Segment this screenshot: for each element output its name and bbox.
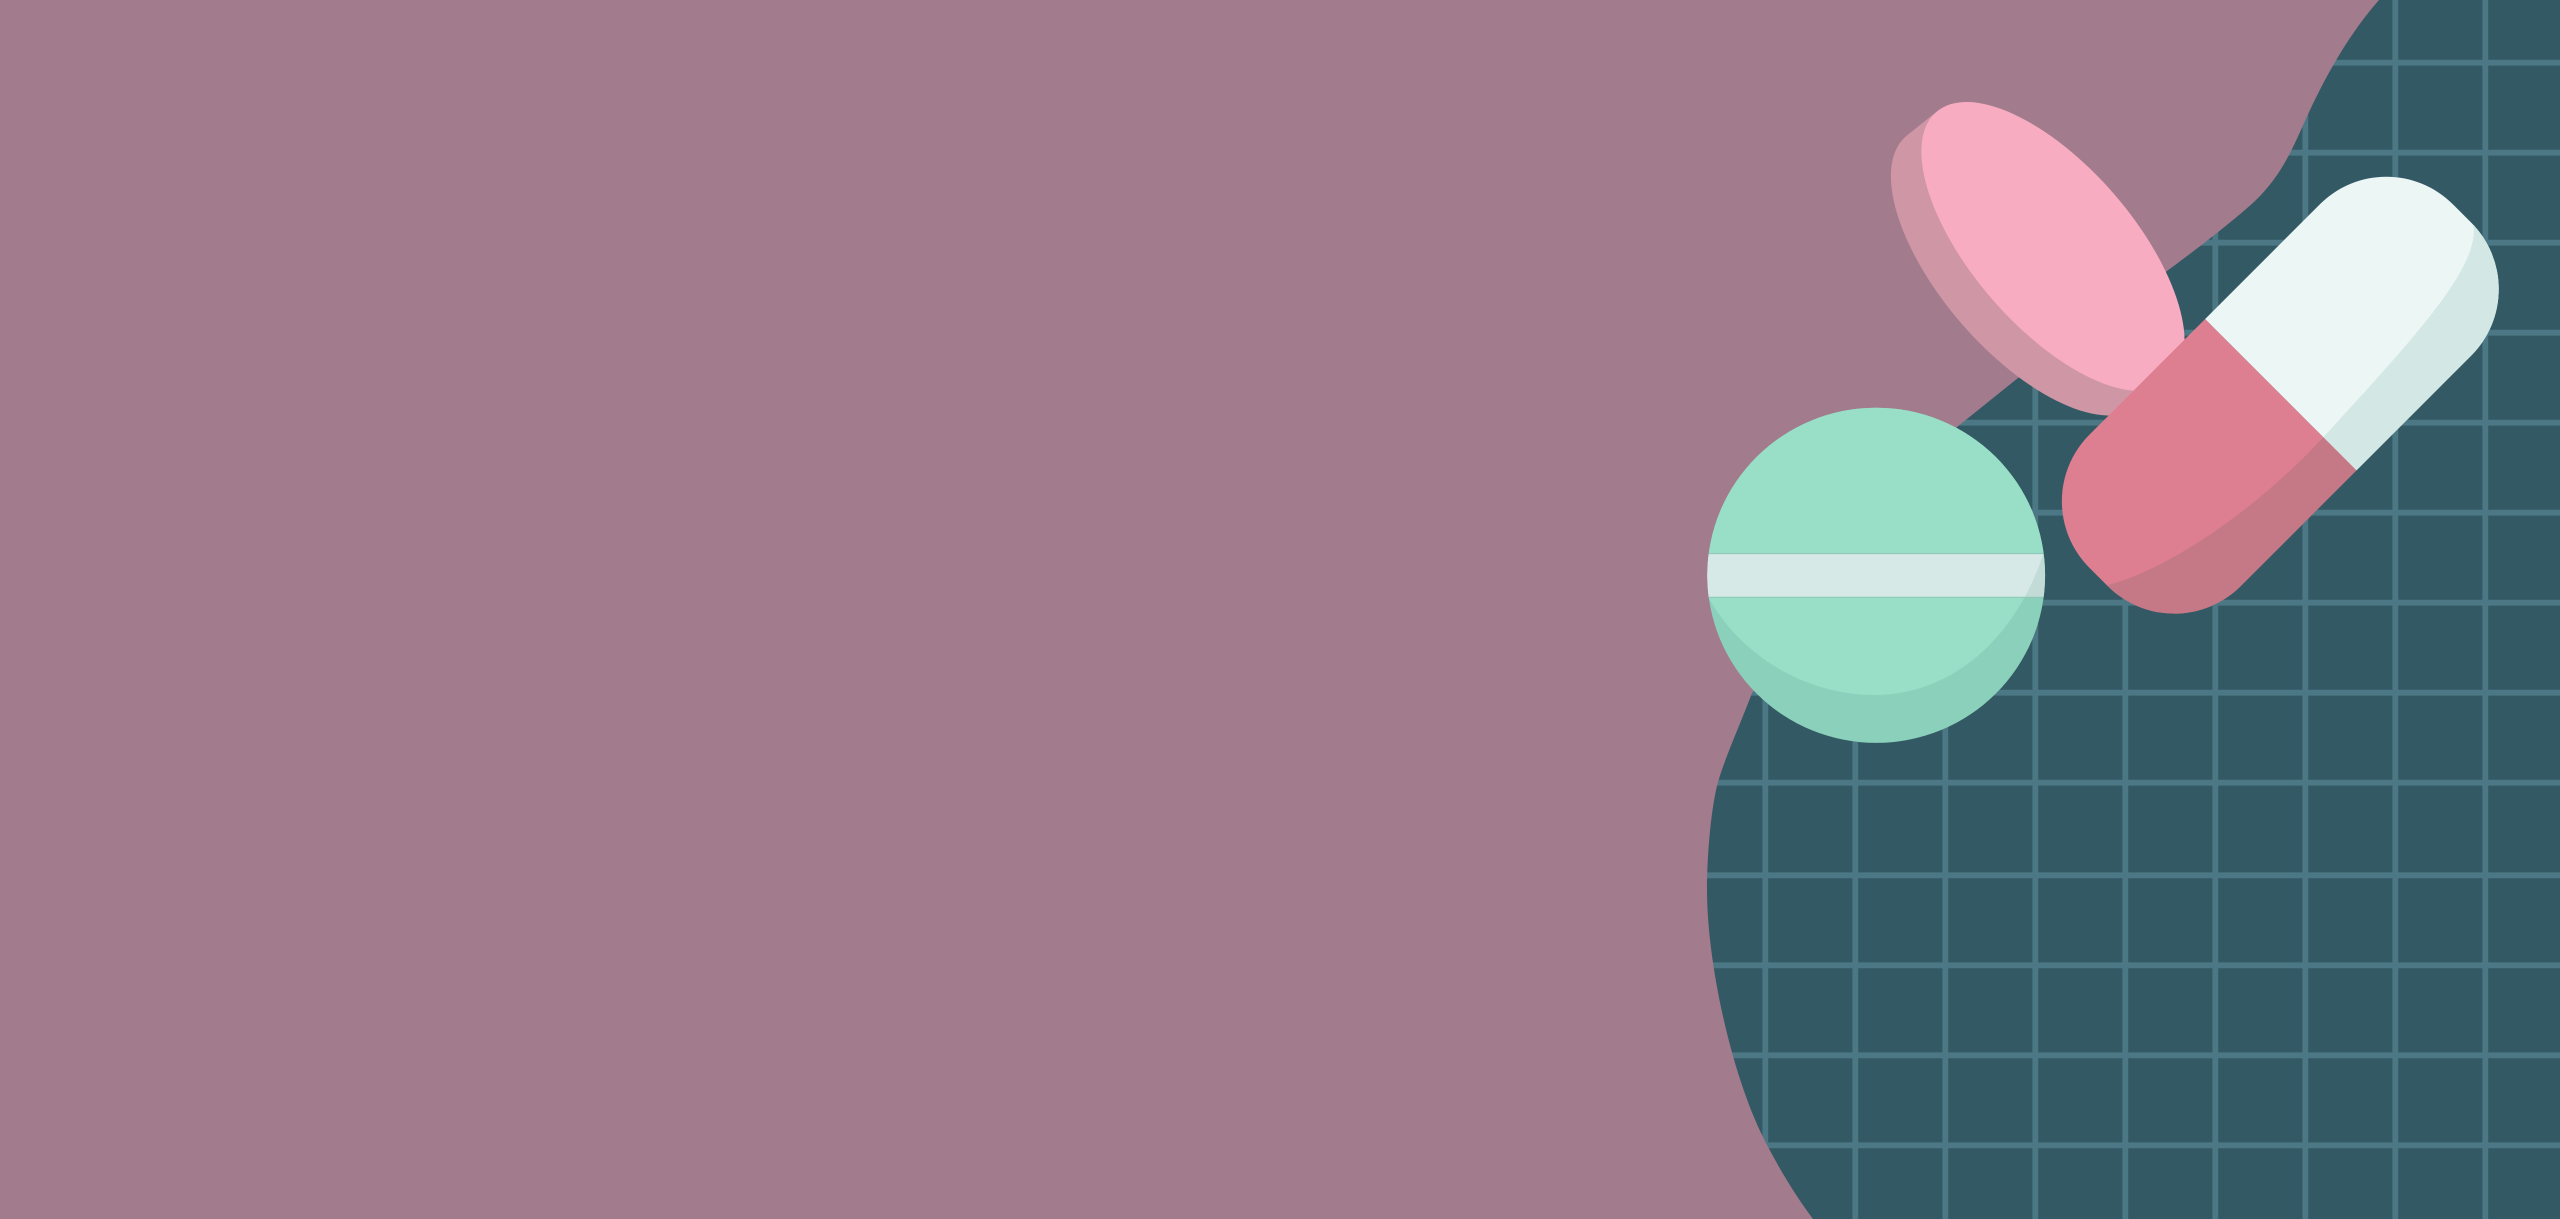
capsule white half [2205,176,2499,470]
tablet base [1707,408,2045,743]
icon: round green tablet [1700,400,2050,743]
tablet face [1875,59,2231,434]
tablet score band [1700,554,2050,597]
tablet light face [1700,400,2050,695]
capsule white shade [2323,225,2499,470]
icon: two-tone capsule [2062,176,2499,614]
capsule pink half [2062,319,2356,614]
tablet side [1845,84,2200,458]
capsule pink shade [2108,437,2356,614]
panel: dark teal background [1600,0,2560,1219]
illustration: pills on grid background [1707,0,2560,1219]
grid lines [1600,0,2560,1219]
icon: pink oval tablet [1845,59,2231,458]
